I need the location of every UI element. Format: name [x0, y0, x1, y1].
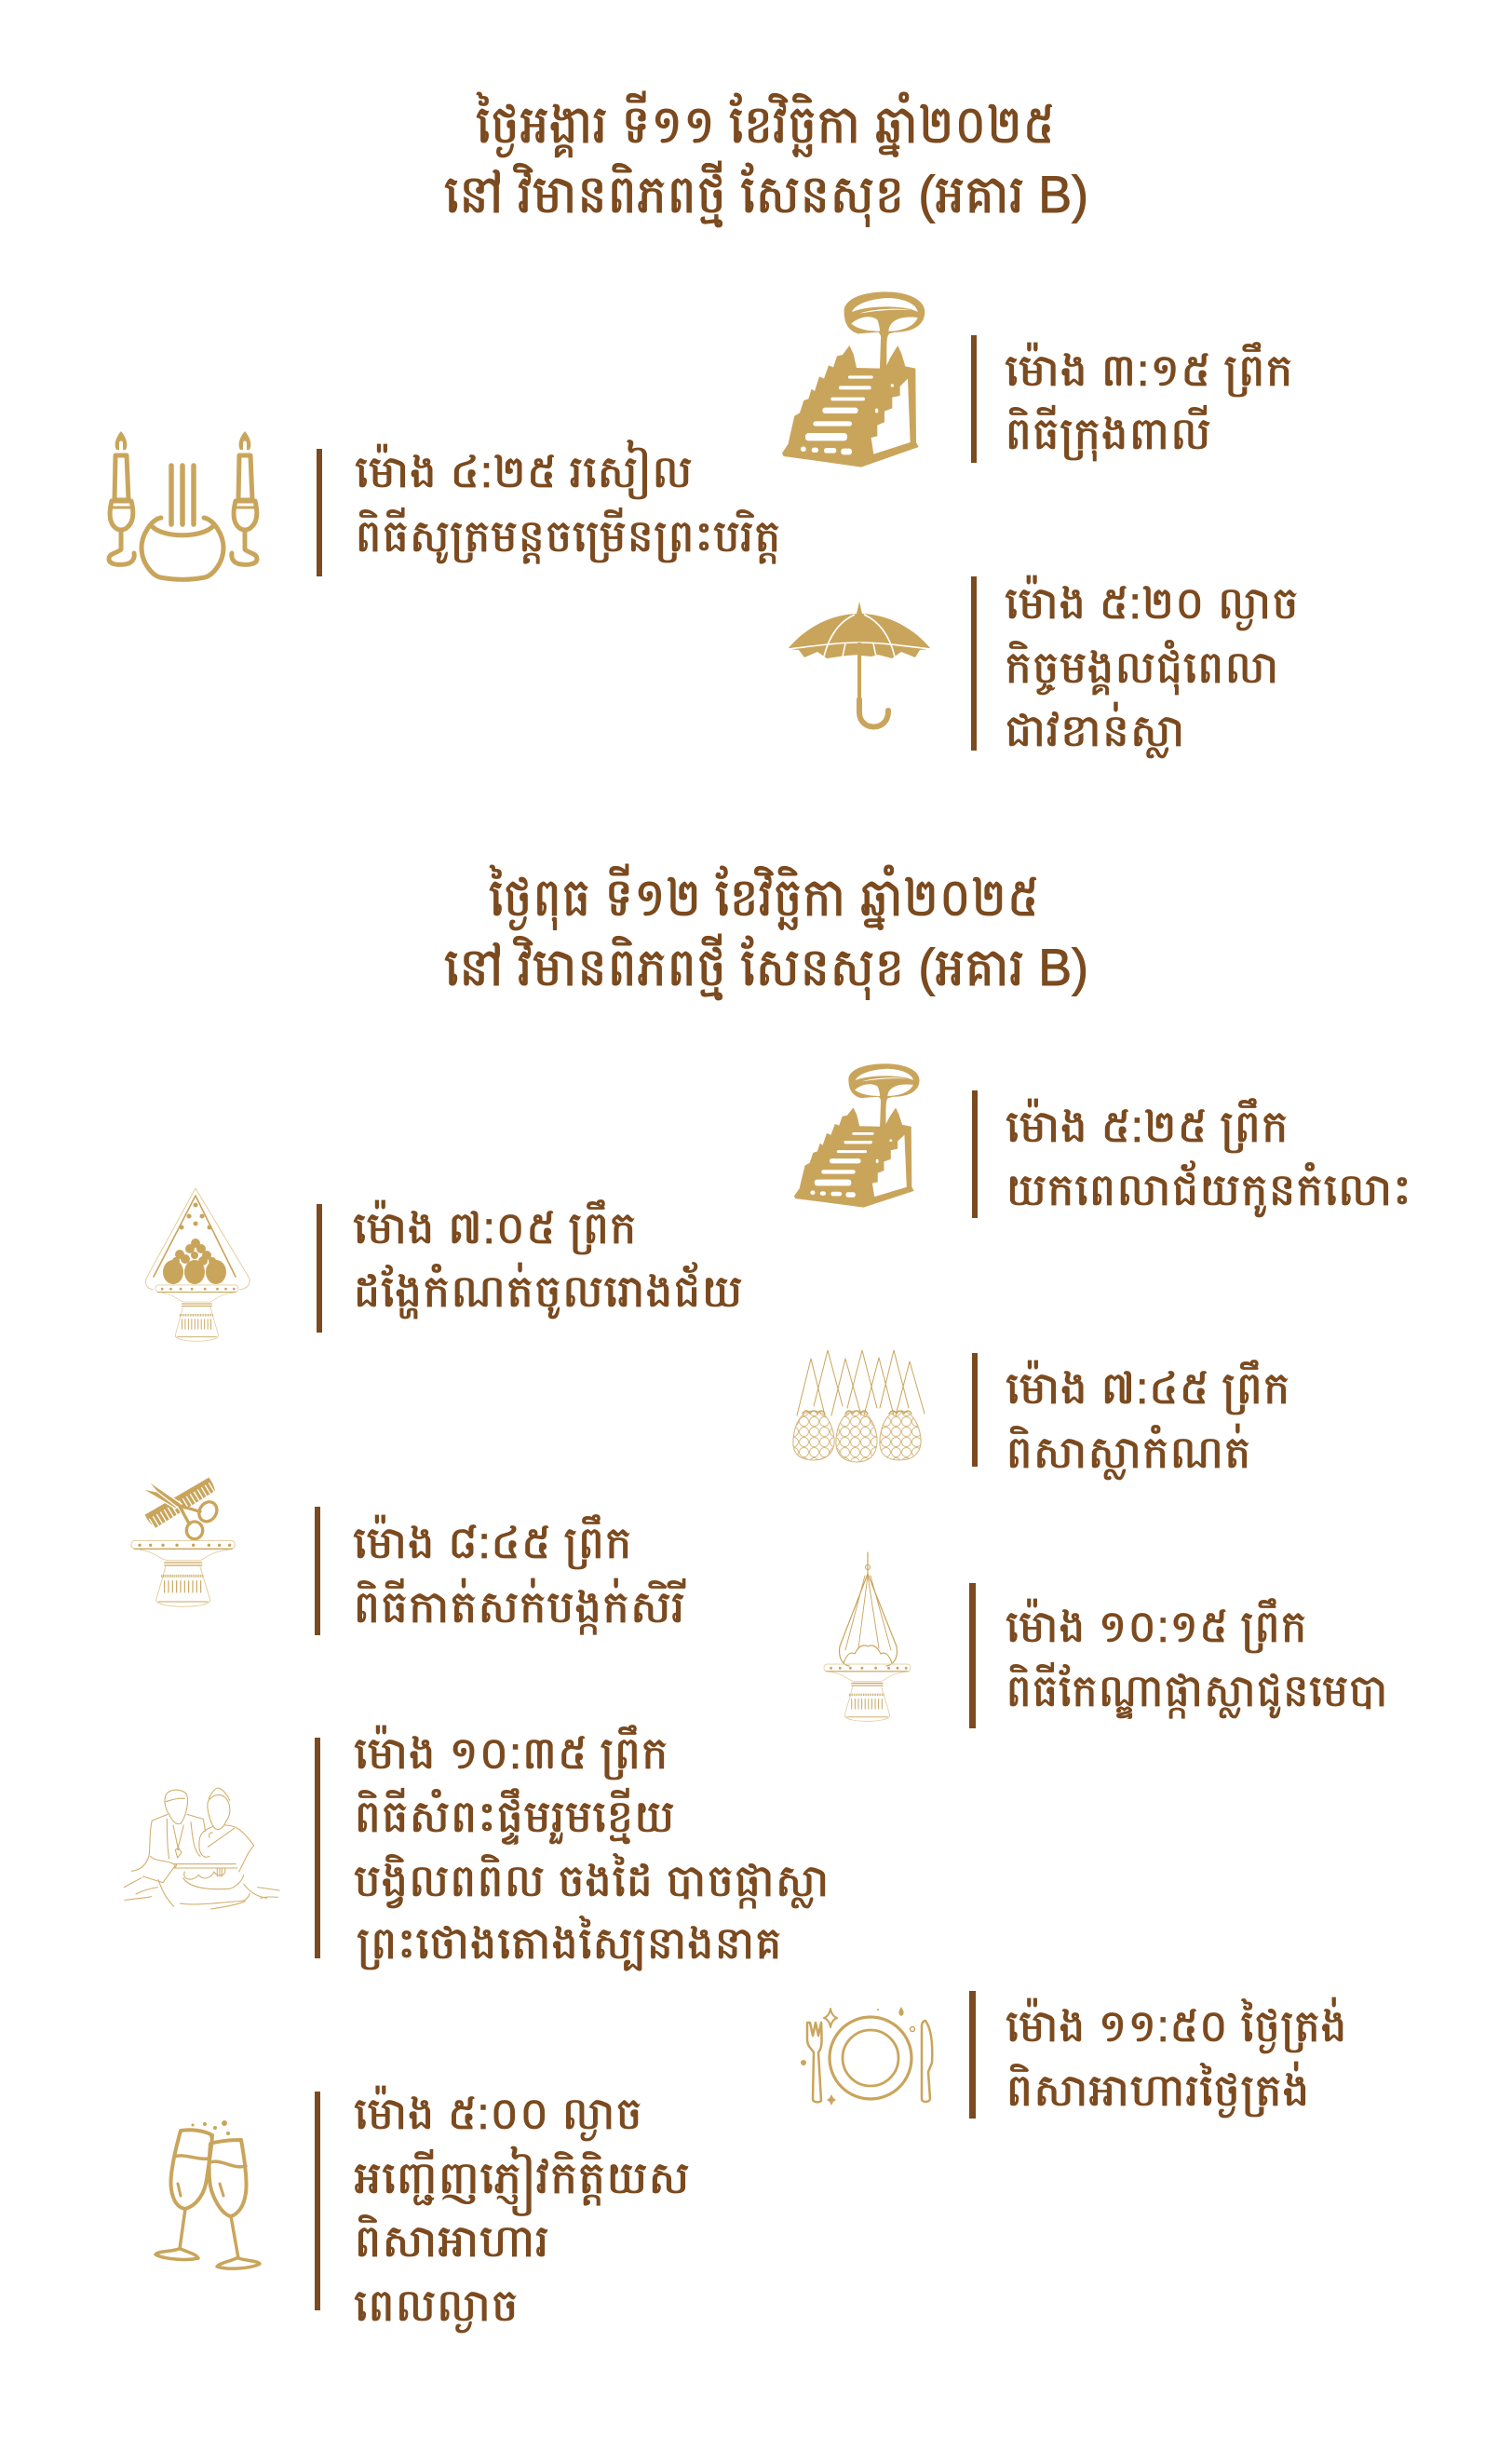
item: 4:25 afternoon [109, 431, 781, 579]
time and label: អញ្ជើញភ្ញៀវកិត្តិយស [354, 2146, 690, 2216]
time and label: ម៉ោង ៥:២០ ល្ងាច [1005, 575, 1299, 631]
divider bar [972, 1090, 978, 1218]
time and label: ពិធីក្រុងពាលី [1005, 404, 1211, 461]
divider bar [969, 1991, 976, 2119]
divider bar [315, 1507, 320, 1635]
time and label: ម៉ោង ៤:២៥ រសៀល [355, 439, 693, 499]
heading: day one: ថ្ងៃអង្គារ ទី១១ ខែវិច្ឆិកា ឆ្នាំ២០២៥ [476, 91, 1055, 157]
time and label: ម៉ោង ១១:៥០ ថ្ងៃត្រង់ [1006, 1997, 1347, 2054]
time and label [353, 1198, 743, 1319]
time and label: កិច្ចមង្គលជុំពេលា [1005, 639, 1279, 695]
item: 11:50 noon [801, 1991, 1347, 2119]
time and label: ពិធីកែណ្ឌាផ្កាស្លាជូនមេបា [1006, 1661, 1388, 1719]
item: 8:45 morning [131, 1478, 685, 1635]
time and label: ពិធីសូត្រមន្តចម្រើនព្រះបរិត្ត [355, 507, 781, 564]
heading: day two [444, 864, 1088, 1000]
icon: champagne toast [155, 2120, 260, 2268]
divider bar [317, 449, 322, 576]
time and label: ពិសាអាហារ [354, 2214, 549, 2267]
icon: lotus cone on pedestal [824, 1552, 911, 1721]
time and label [1006, 1597, 1388, 1719]
time and label: ពេលល្ងាច [354, 2281, 519, 2334]
item: 5:25 morning [794, 1063, 1411, 1218]
time and label [1005, 575, 1299, 758]
divider bar [971, 335, 977, 463]
time and label: ពិធីកាត់សក់បង្កក់សិរី [353, 1577, 685, 1635]
item: 7:05 morning [146, 1188, 743, 1341]
divider bar [969, 1583, 976, 1728]
divider bar [315, 1738, 320, 1958]
divider bar [315, 2092, 320, 2310]
heading: day two: ថ្ងៃពុធ ទី១២ ខែវិច្ឆិកា ឆ្នាំ២០២៥ [489, 864, 1039, 930]
icon: fruit offering on pedestal [146, 1188, 250, 1341]
icon: plate with fork and knife [801, 2007, 932, 2105]
time and label [1006, 1359, 1290, 1480]
heading: day one [444, 91, 1088, 227]
time and label [353, 1513, 685, 1635]
item: 5:20 evening [788, 575, 1299, 758]
time and label: ម៉ោង ៣:១៥ ព្រឹក [1005, 341, 1293, 398]
item: 3:15 morning [782, 291, 1293, 467]
heading: day two: នៅ វិមានពិភពថ្មី សែនសុខ (អគារ B) [444, 934, 1088, 1000]
time and label: ព្រះថោងតោងស្បៃនាងនាគ [357, 1915, 782, 1971]
divider bar [971, 576, 977, 751]
heading: day one: នៅ វិមានពិភពថ្មី សែនសុខ (អគារ B) [444, 161, 1088, 227]
item: 10:15 morning [824, 1552, 1388, 1728]
item: 5:00 evening [155, 2085, 690, 2334]
icon: golden umbrella [788, 602, 931, 727]
icon: comb and scissors on tray [131, 1478, 235, 1606]
icon: candles and incense bowl [109, 431, 257, 579]
time and label [1005, 341, 1293, 461]
time and label: ជាវខាន់ស្លា [1005, 701, 1185, 758]
time and label: ម៉ោង ៥:២៥ ព្រឹក [1006, 1097, 1289, 1154]
time and label: ពិសាអាហារថ្ងៃត្រង់ [1006, 2061, 1310, 2119]
time and label [355, 439, 781, 564]
time and label: ម៉ោង ១០:១៥ ព្រឹក [1006, 1597, 1307, 1654]
item: 10:35 morning [124, 1724, 830, 1971]
icon: temple offering stairs [794, 1063, 920, 1208]
time and label [354, 1724, 830, 1971]
icon: temple offering stairs [782, 291, 925, 467]
divider bar [972, 1353, 978, 1467]
time and label: ដង្ហែកំណត់ចូលរោងជ័យ [353, 1262, 743, 1319]
time and label [1006, 1997, 1347, 2119]
time and label: បង្វិលពពិល ចងដៃ បាចផ្កាស្លា [354, 1852, 830, 1909]
time and label: ម៉ោង ១០:៣៥ ព្រឹក [354, 1724, 668, 1780]
time and label: ពិធីសំពះផ្ទឹមរួមខ្មើយ [354, 1787, 675, 1845]
icon: bride and groom line drawing [124, 1788, 279, 1909]
time and label [354, 2085, 690, 2334]
icon: three offering baskets [793, 1350, 925, 1462]
time and label [1006, 1097, 1411, 1217]
time and label: ម៉ោង ៥:០០ ល្ងាច [354, 2085, 642, 2142]
divider bar [317, 1204, 322, 1333]
time and label: ពិសាស្លាកំណត់ [1006, 1423, 1251, 1480]
time and label: ម៉ោង ៧:០៥ ព្រឹក [353, 1198, 637, 1255]
time and label: យកពេលាជ័យកូនកំលោះ [1006, 1160, 1411, 1217]
time and label: ម៉ោង ៨:៤៥ ព្រឹក [353, 1513, 632, 1570]
item: 7:45 morning [793, 1350, 1290, 1480]
time and label: ម៉ោង ៧:៤៥ ព្រឹក [1006, 1359, 1290, 1415]
